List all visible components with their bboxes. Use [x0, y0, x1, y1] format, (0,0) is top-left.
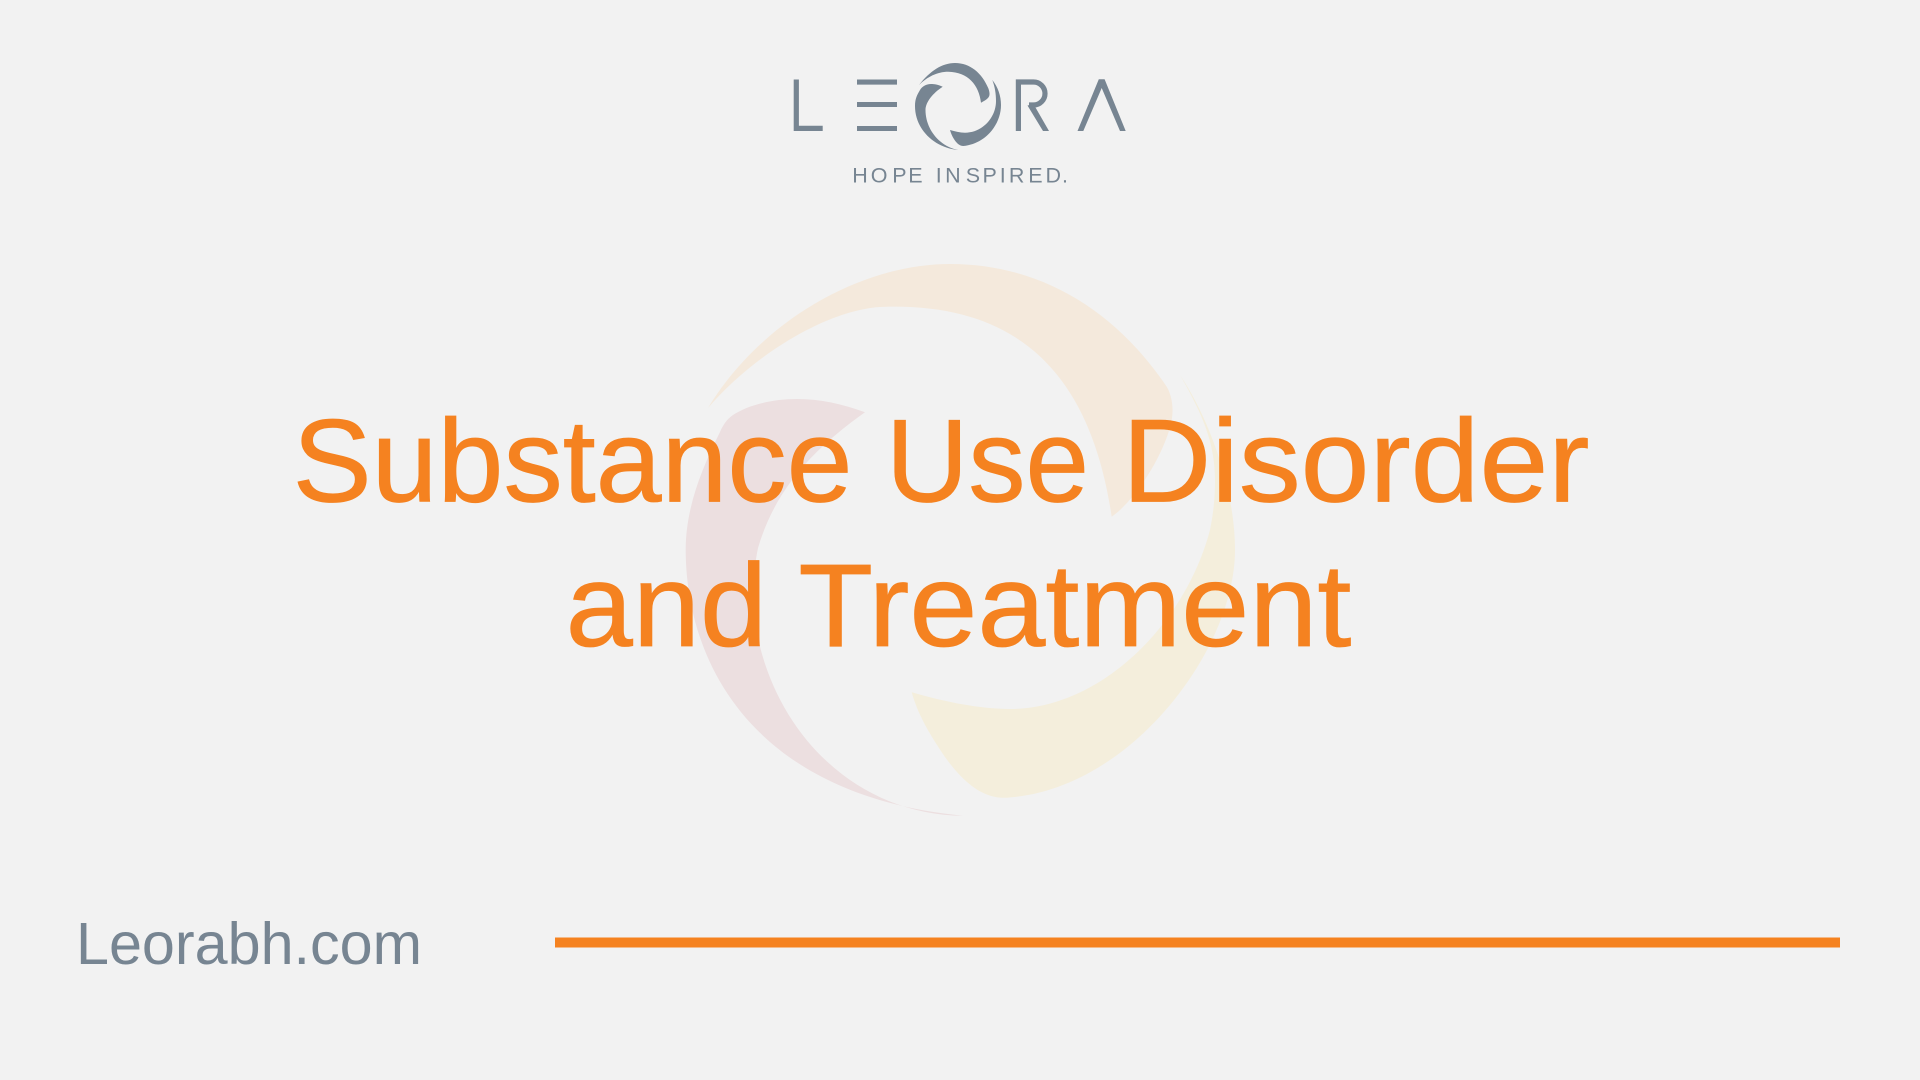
swirl blade: peach [708, 264, 1173, 517]
title [293, 396, 1590, 672]
logo letter E [857, 80, 897, 131]
title line 1: Substance [293, 396, 853, 528]
title line 1: Use [886, 396, 1089, 528]
title line 2: Treatment [798, 540, 1351, 672]
logo letter A [1078, 79, 1126, 131]
title line 1 [293, 396, 1590, 528]
logo tagline: HOPE INSPIRED. [852, 164, 1068, 188]
logo: Leora wordmark [796, 63, 1126, 188]
logo letter L [796, 80, 823, 128]
logo letter R [1018, 82, 1049, 131]
swirl blade: mauve [686, 399, 963, 816]
swirl blade: pale yellow [912, 375, 1235, 798]
title line 2: and [566, 540, 767, 672]
title line 1: Disorder [1122, 396, 1590, 528]
background swirl watermark [686, 264, 1235, 816]
title line 2 [566, 540, 1351, 672]
orange divider bar [555, 938, 1840, 948]
logo swirl [915, 63, 1001, 150]
website label: Leorabh.com [76, 911, 422, 977]
